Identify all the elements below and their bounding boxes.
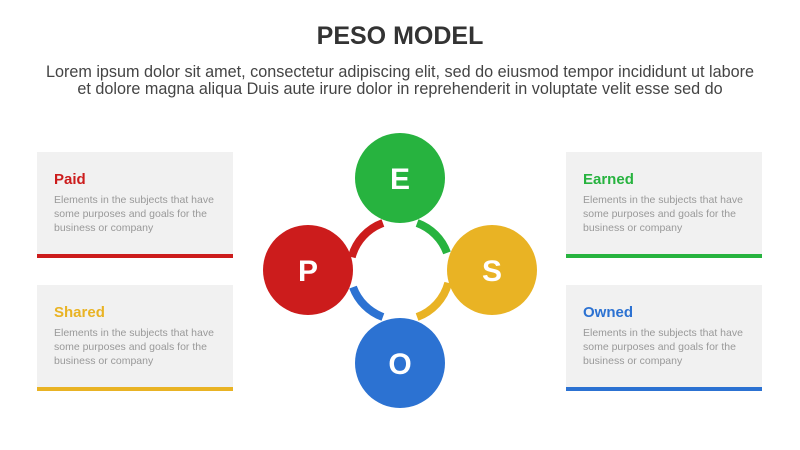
panel: shared: Shared xyxy=(54,304,105,321)
panel: paid: Elements in the subjects that have some purposes and goals for the business or company xyxy=(54,194,214,234)
panel: owned: Elements in the subjects that have some purposes and goals for the business or company xyxy=(583,327,743,367)
subtitle: Lorem ipsum dolor sit amet, consectetur adipiscing elit, sed do eiusmod tempor incididunt ut labore xyxy=(46,63,754,81)
diagram: PESO circles: E xyxy=(390,163,410,196)
panel: owned: Owned xyxy=(583,304,633,321)
panel: shared xyxy=(37,285,233,391)
panel: paid: Paid xyxy=(54,171,86,188)
panel: earned: Elements in the subjects that have some purposes and goals for the business or company xyxy=(583,194,743,234)
panel: earned: Earned xyxy=(583,171,634,188)
diagram: PESO circles: S xyxy=(482,255,502,288)
subtitle xyxy=(46,63,754,98)
subtitle: et dolore magna aliqua Duis aute irure dolor in reprehenderit in voluptate velit esse sed do xyxy=(77,80,723,98)
panel: earned xyxy=(566,152,762,258)
title: PESO MODEL xyxy=(317,22,483,50)
diagram: PESO circles: P xyxy=(298,255,318,288)
diagram: PESO circles: O xyxy=(388,348,412,381)
panel: shared: Elements in the subjects that have some purposes and goals for the business or company xyxy=(54,327,214,367)
panel: owned xyxy=(566,285,762,391)
panel: paid xyxy=(37,152,233,258)
